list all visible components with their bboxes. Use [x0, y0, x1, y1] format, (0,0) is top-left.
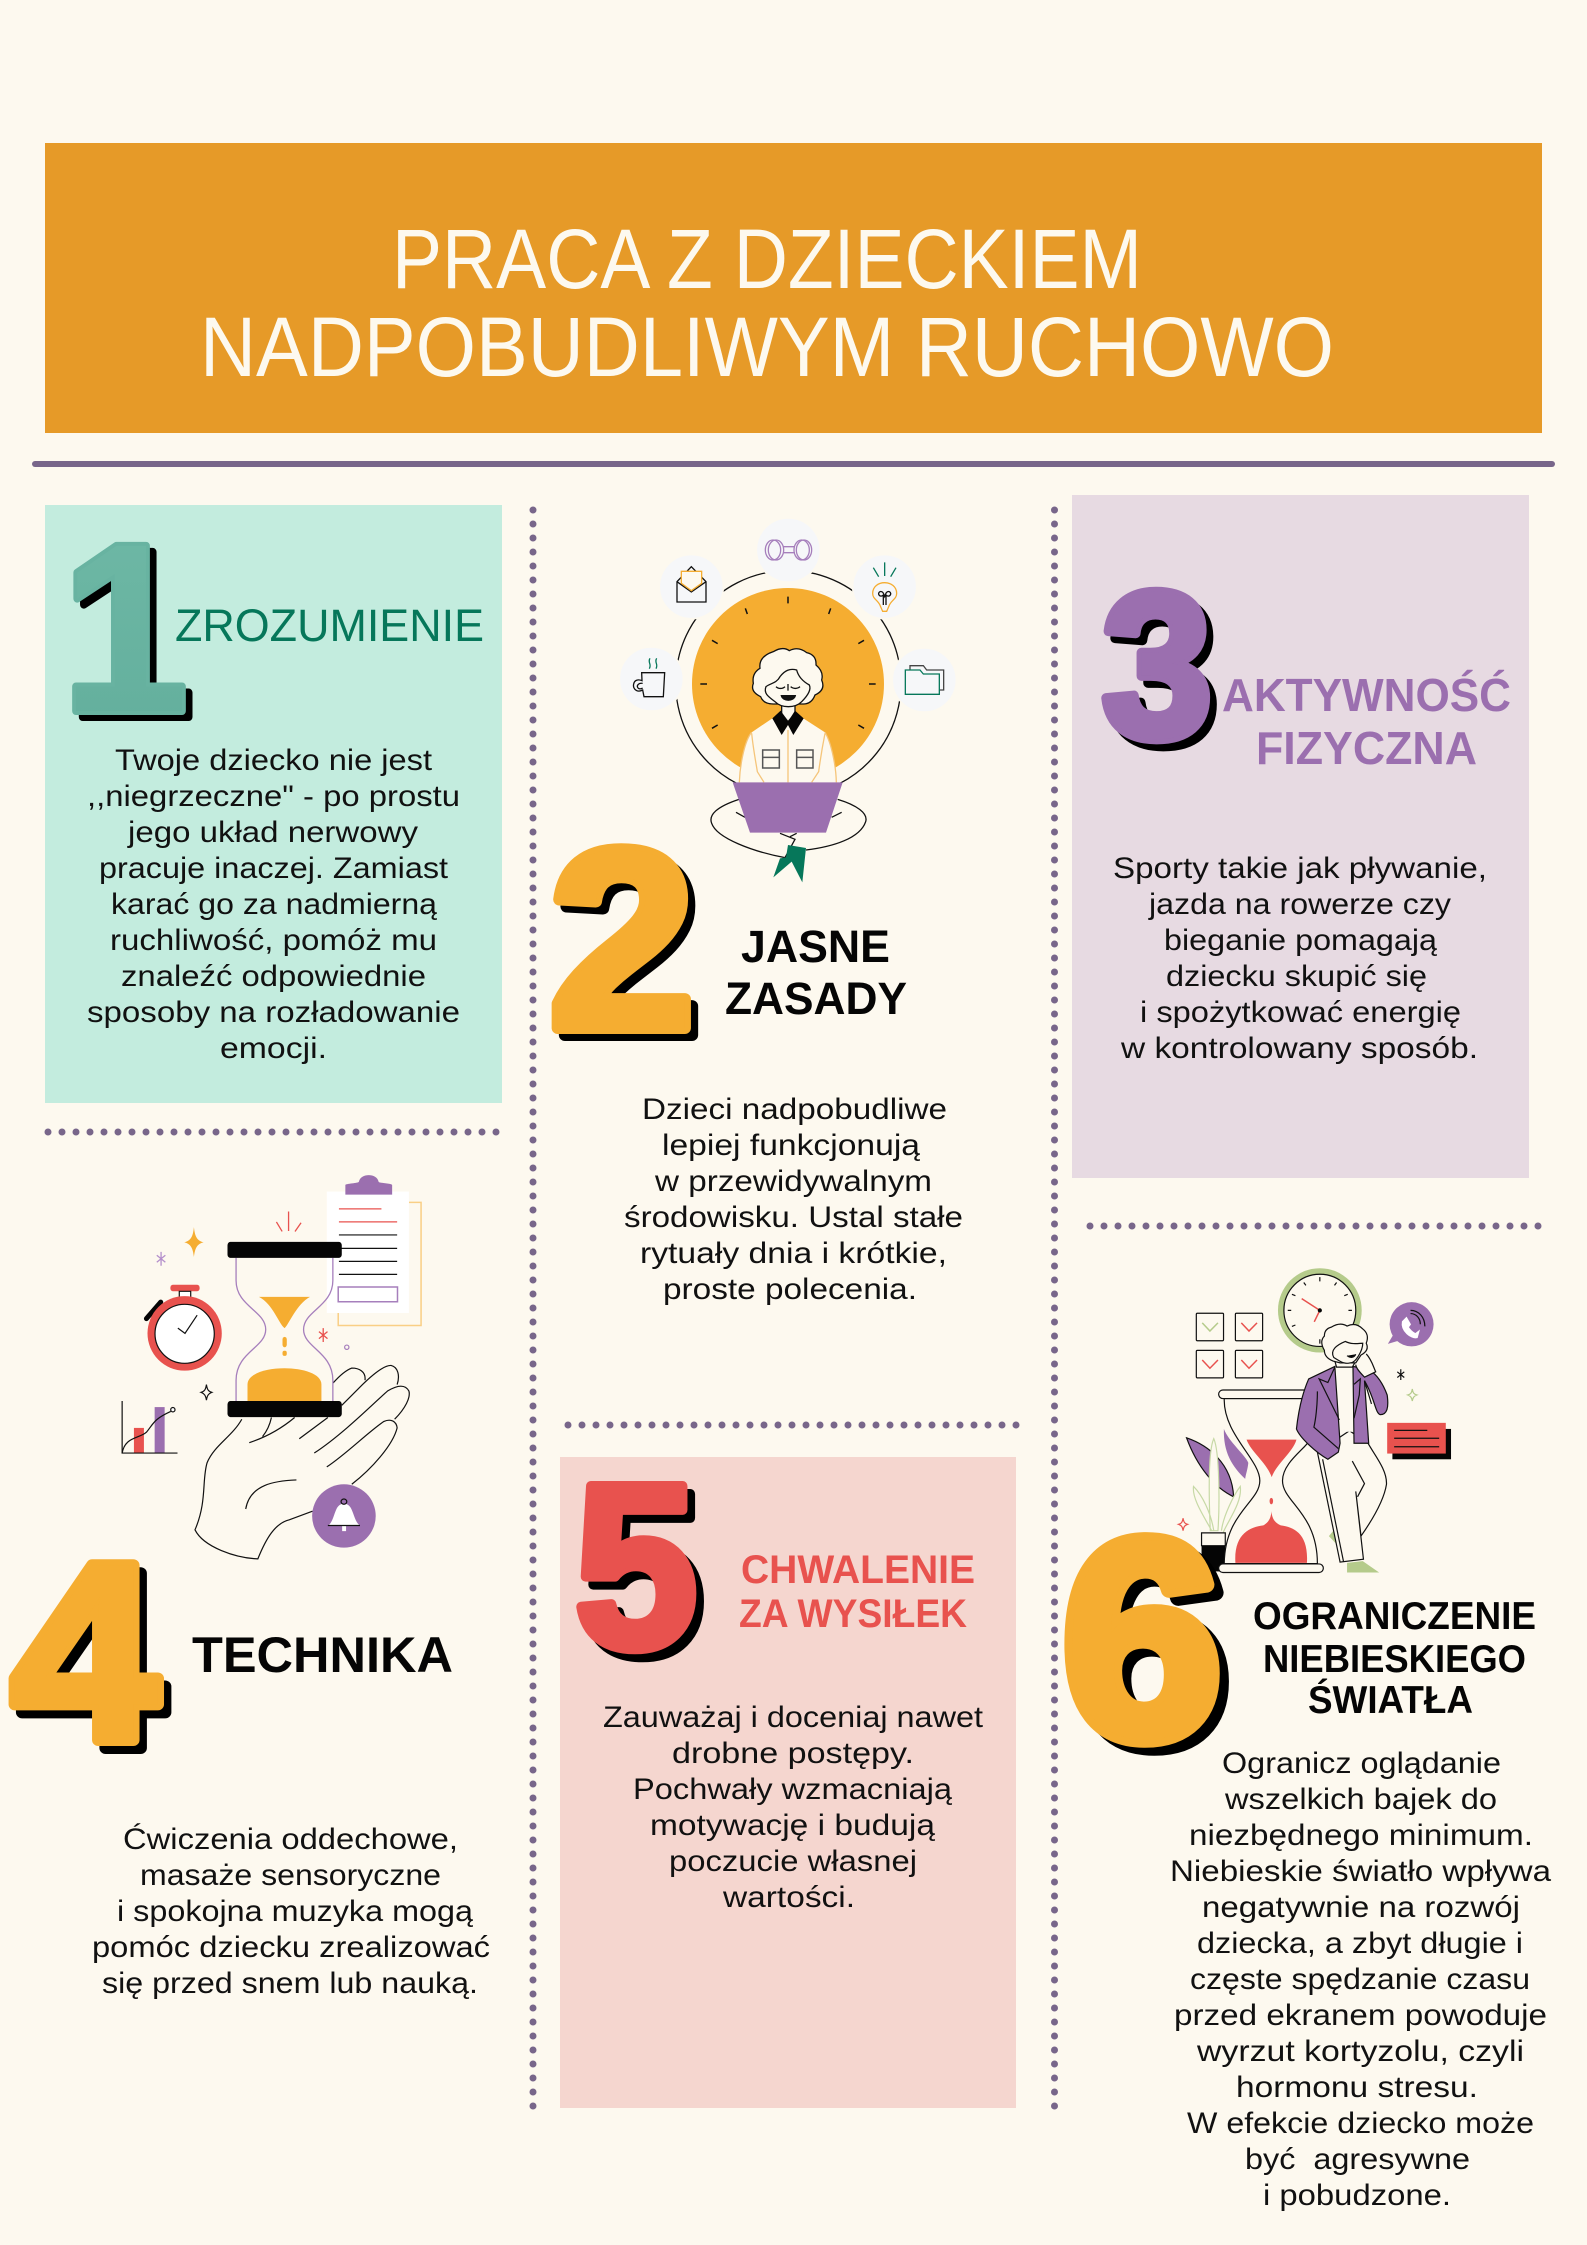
text: chwalenie: Zauważaj i doceniaj nawet — [603, 1701, 984, 1734]
text: aktywnosc fizyczna: Sporty takie jak pływanie, — [1113, 852, 1487, 885]
text: aktywnosc fizyczna: dziecku skupić się — [1166, 960, 1427, 993]
check boxes — [1196, 1313, 1263, 1378]
heading: aktywnosc fizyczna: FIZYCZNA — [1256, 722, 1477, 774]
text: aktywnosc fizyczna: bieganie pomagają — [1164, 924, 1437, 957]
panel: 5 chwalenie — [560, 1436, 1016, 2108]
text: ograniczenie: częste spędzanie czasu — [1190, 1963, 1530, 1996]
title banner — [45, 143, 1542, 433]
text: technika: masaże sensoryczne — [140, 1859, 441, 1892]
text: ograniczenie — [1170, 1747, 1551, 2212]
heading: ograniczenie niebieskiego swiatla: NIEBIESKIEGO — [1263, 1638, 1526, 1681]
hourglass — [227, 1212, 342, 1417]
numeral 2: 2 — [556, 804, 703, 1090]
heading: aktywnosc fizyczna — [1222, 669, 1511, 774]
text: zrozumienie: emocji. — [220, 1032, 327, 1065]
text: ograniczenie: dziecka, a zbyt długie i — [1197, 1927, 1523, 1960]
heading: jasne zasady: JASNE — [741, 921, 890, 972]
text: zrozumienie — [87, 744, 460, 1065]
panel: 2 jasne zasady — [549, 797, 963, 1306]
icon: folders — [905, 666, 944, 694]
heading: jasne zasady — [725, 921, 907, 1024]
clipboard — [327, 1175, 421, 1326]
title banner: PRACA Z DZIECKIEM — [392, 212, 1142, 306]
numeral 1: 1 — [62, 494, 188, 762]
sparkles — [157, 1227, 349, 1400]
numeral 5: 5 — [582, 1444, 705, 1705]
text: jasne zasady: proste polecenia. — [663, 1273, 917, 1306]
illustration: meditating person with clock — [619, 518, 956, 882]
hand — [195, 1365, 409, 1559]
text: ograniczenie: negatywnie na rozwój — [1202, 1891, 1520, 1924]
heading: ograniczenie niebieskiego swiatla: ŚWIATŁA — [1308, 1678, 1473, 1722]
illustration: person on phone with hourglass — [1179, 1268, 1451, 1572]
numeral 3: 3 — [1108, 556, 1219, 789]
text: chwalenie: Pochwały wzmacniają — [633, 1773, 952, 1806]
plant — [1179, 1429, 1248, 1571]
text: chwalenie — [603, 1701, 984, 1914]
figure: person on phone — [1296, 1324, 1388, 1572]
figure: person — [711, 649, 866, 882]
panel: 1 zrozumienie — [45, 494, 502, 1103]
heading: ograniczenie niebieskiego swiatla — [1253, 1595, 1536, 1722]
text: zrozumienie: ruchliwość, pomóż mu — [110, 924, 437, 957]
text: ograniczenie: W efekcie dziecko może — [1187, 2107, 1534, 2140]
text: jasne zasady: rytuały dnia i krótkie, — [640, 1237, 947, 1270]
icon: dumbbell — [765, 540, 812, 560]
text: jasne zasady: środowisku. Ustal stałe — [624, 1201, 963, 1234]
text: ograniczenie: być agresywne — [1245, 2143, 1470, 2176]
text: aktywnosc fizyczna: w kontrolowany sposób. — [1120, 1032, 1478, 1065]
heading: chwalenie za wysilek: CHWALENIE — [741, 1548, 975, 1592]
text: ograniczenie: hormonu stresu. — [1236, 2071, 1478, 2104]
numeral 6: 6 — [1071, 1491, 1231, 1805]
sparkles — [1397, 1369, 1417, 1401]
panel: 3 aktywnosc fizyczna — [1072, 495, 1529, 1178]
text: zrozumienie: ,,niegrzeczne" - po prostu — [87, 780, 460, 813]
text: zrozumienie: Twoje dziecko nie jest — [115, 744, 433, 777]
text: ograniczenie: przed ekranem powoduje — [1174, 1999, 1547, 2032]
numeral 3: 3 — [1101, 549, 1213, 782]
numeral 4: 4 — [11, 1511, 161, 1795]
text: chwalenie: drobne postępy. — [672, 1737, 914, 1770]
text: ograniczenie: niezbędnego minimum. — [1189, 1819, 1533, 1852]
numeral 4: 4 — [18, 1519, 168, 1803]
text: jasne zasady: Dzieci nadpobudliwe — [642, 1093, 947, 1126]
numeral 2: 2 — [549, 797, 695, 1083]
text: ograniczenie: wszelkich bajek do — [1224, 1783, 1497, 1816]
title banner: NADPOBUDLIWYM RUCHOWO — [200, 300, 1334, 394]
stopwatch — [146, 1285, 222, 1371]
text: zrozumienie: jego układ nerwowy — [127, 816, 418, 849]
text: jasne zasady: lepiej funkcjonują — [662, 1129, 920, 1162]
icon: light bulb — [873, 562, 897, 611]
icon: cup — [634, 658, 665, 697]
icon: envelope — [677, 567, 706, 602]
text: zrozumienie: sposoby na rozładowanie — [87, 996, 460, 1029]
wall clock — [1278, 1268, 1362, 1352]
text: ograniczenie: i pobudzone. — [1263, 2179, 1451, 2212]
text: technika: i spokojna muzyka mogą — [117, 1895, 473, 1928]
heading: ograniczenie niebieskiego swiatla: OGRANICZENIE — [1253, 1595, 1536, 1638]
text: aktywnosc fizyczna: i spożytkować energię — [1140, 996, 1461, 1029]
heading: chwalenie za wysilek: ZA WYSIŁEK — [739, 1592, 967, 1636]
text: technika: Ćwiczenia oddechowe, — [123, 1823, 458, 1856]
text: zrozumienie: znaleźć odpowiednie — [121, 960, 426, 993]
text: ograniczenie: wyrzut kortyzolu, czyli — [1196, 2035, 1524, 2068]
heading: aktywnosc fizyczna: AKTYWNOŚĆ — [1222, 669, 1511, 721]
mini chart — [122, 1401, 177, 1453]
text: technika: pomóc dziecku zrealizować — [92, 1931, 490, 1964]
heading: technika: TECHNIKA — [192, 1627, 453, 1683]
text: zrozumienie: pracuje inaczej. Zamiast — [99, 852, 449, 885]
text: chwalenie: wartości. — [722, 1881, 855, 1914]
text: technika — [92, 1823, 490, 2000]
text: aktywnosc fizyczna — [1113, 852, 1487, 1065]
illustration: hourglass on hand — [122, 1175, 421, 1559]
panel: 4 technika — [11, 1511, 490, 2000]
text: chwalenie: motywację i budują — [650, 1809, 935, 1842]
red note card — [1387, 1423, 1451, 1459]
panel: 6 ograniczenie niebieskiego swiatla — [1062, 1483, 1551, 2212]
text: chwalenie: poczucie własnej — [669, 1845, 917, 1878]
text: jasne zasady: w przewidywalnym — [654, 1165, 932, 1198]
text: technika: się przed snem lub nauką. — [102, 1967, 478, 2000]
heading: zrozumienie: ZROZUMIENIE — [175, 600, 484, 651]
bell badge — [312, 1484, 376, 1548]
text: ograniczenie: Ogranicz oglądanie — [1222, 1747, 1501, 1780]
text: jasne zasady — [624, 1093, 963, 1306]
heading: jasne zasady: ZASADY — [725, 973, 907, 1024]
hourglass — [1219, 1390, 1323, 1572]
text: ograniczenie: Niebieskie światło wpływa — [1170, 1855, 1551, 1888]
text: zrozumienie: karać go za nadmierną — [111, 888, 437, 921]
phone bubble — [1388, 1302, 1434, 1346]
heading: chwalenie za wysilek — [739, 1548, 975, 1636]
numeral 1: 1 — [68, 500, 195, 768]
text: aktywnosc fizyczna: jazda na rowerze czy — [1148, 888, 1451, 921]
numeral 6: 6 — [1062, 1483, 1222, 1797]
numeral 5: 5 — [574, 1436, 698, 1697]
